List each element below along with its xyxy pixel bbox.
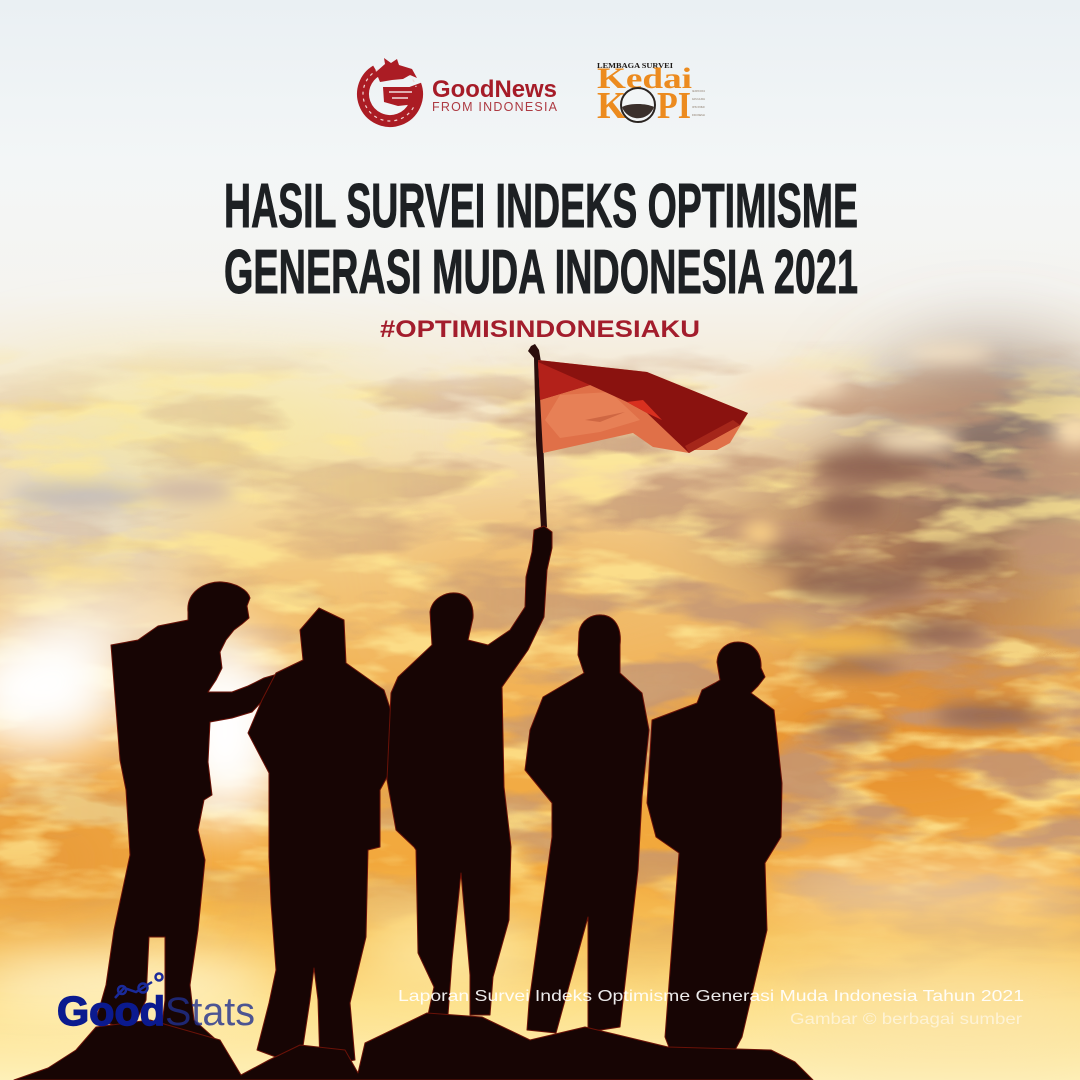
source note: Gambar © berbagai sumber — [790, 1011, 1023, 1028]
silhouette: person 3 raising the flag — [387, 526, 552, 1015]
silhouette: person 4 — [525, 615, 649, 1033]
source note: Laporan Survei Indeks Optimisme Generasi Muda Indonesia Tahun 2021 — [398, 988, 1024, 1005]
title — [224, 172, 858, 307]
logo: GoodNews from Indonesia — [355, 58, 558, 129]
logo: Lembaga Survei Kedai Kopi: OPINI PUBLIK — [692, 105, 705, 109]
text: KELOMPOK DISKUSI — [692, 89, 705, 93]
icon: data network dots — [115, 974, 162, 998]
logo: Lembaga Survei Kedai Kopi: LEMBAGA SURVEI — [597, 61, 673, 70]
logo: Lembaga Survei Kedai Kopi: INDONESIA — [692, 113, 705, 117]
logo: GoodStats: Stats — [165, 990, 255, 1034]
flag: Indonesian red and white on pole — [528, 344, 748, 528]
logo: Lembaga Survei Kedai Kopi: DAN KAJIAN — [692, 97, 705, 101]
hashtag: #OPTIMISINDONESIAKU — [380, 316, 700, 343]
silhouette: person 2 with hat — [248, 608, 393, 1066]
logo: Lembaga Survei Kedai Kopi — [597, 61, 705, 127]
logo: GoodNews from Indonesia: FROM INDONESIA — [432, 100, 558, 114]
source note — [398, 988, 1024, 1028]
logo: Lembaga Survei Kedai Kopi: Kedai — [597, 62, 692, 95]
rocky ground — [14, 1013, 813, 1080]
logo: Lembaga Survei Kedai Kopi: K — [597, 85, 626, 127]
logo: GoodNews from Indonesia: GoodNews — [432, 76, 557, 103]
silhouette: person 1 with backpack — [96, 582, 288, 1050]
silhouettes: five young people on a rocky peak — [14, 526, 813, 1080]
logo: GoodStats — [57, 974, 255, 1034]
logo: Lembaga Survei Kedai Kopi: PI — [657, 85, 691, 127]
silhouette: person 5 with backpack — [647, 642, 782, 1050]
logo: GoodStats: Good — [57, 988, 165, 1034]
